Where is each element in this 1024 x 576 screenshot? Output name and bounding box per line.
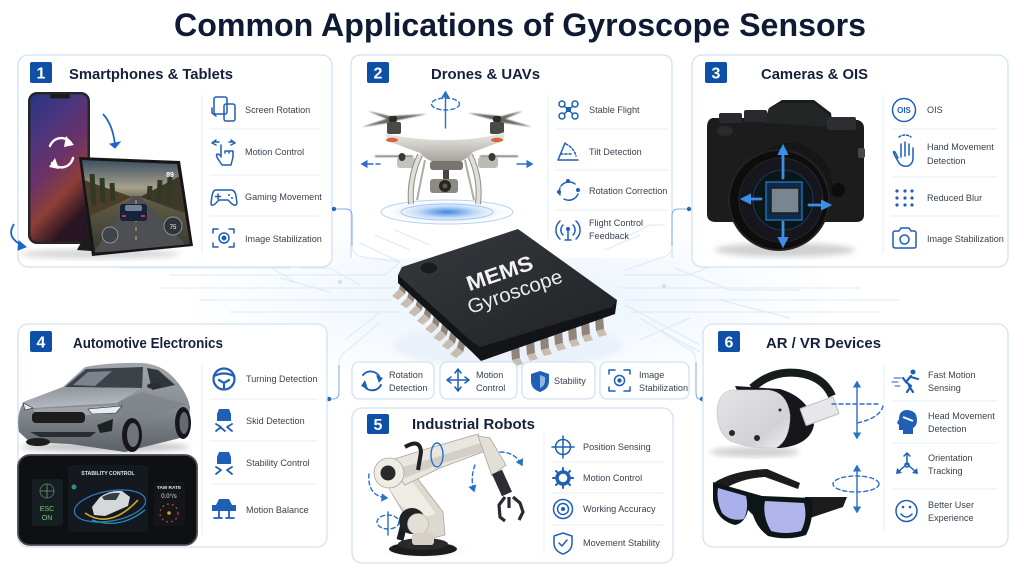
feature: head movement detection: Detection [928,424,966,434]
feature: tilt detection [558,143,642,160]
illustration: drone [362,111,532,225]
feature: position sensing: Position Sensing [583,442,651,452]
feature: image stabilization [893,228,1004,248]
feature: orientation tracking: Tracking [928,466,963,476]
heading: Cameras & OIS [761,67,868,83]
feature: hand movement detection: Detection [927,156,965,166]
feature: reduced blur [895,189,982,207]
chip pins, lower-right side [511,316,607,366]
feature: working accuracy: Working Accuracy [583,504,656,514]
feature: screen rotation [212,97,310,121]
tag: image stabilization [600,362,689,399]
badge 2 [367,62,389,83]
chip label: MEMS [464,252,536,296]
illustration: stability control dashboard: ESC [40,506,54,513]
badge 1: 1 [37,66,46,82]
chip pins, lower-left side [392,282,465,358]
feature: movement stability: Movement Stability [583,538,660,548]
feature: fast motion sensing [892,370,976,393]
feature: movement stability [554,533,660,554]
illustration: smart glasses [713,469,847,538]
illustration: stability control dashboard: STABILITY CONTROL [81,471,136,477]
feature: tilt detection: Tilt Detection [589,147,642,157]
feature: flight control feedback [556,218,643,241]
heading: Drones & UAVs [431,67,540,83]
feature: motion control: Motion Control [583,473,642,483]
feature: reduced blur: Reduced Blur [927,193,982,203]
feature: hand movement detection [894,135,994,166]
feature: screen rotation: Screen Rotation [245,105,310,115]
feature: working accuracy [554,500,656,518]
badge 4: 4 [37,334,46,352]
chip label: Gyroscope [465,266,565,319]
feature: motion balance [212,499,309,518]
feature: fast motion sensing: Fast Motion [928,370,976,380]
badge 3: 3 [712,66,721,82]
chip feature tags [352,362,689,399]
feature: better user experience: Experience [928,513,974,523]
tag: stability [522,362,595,399]
feature: stability control [216,452,310,474]
feature: motion control: Motion Control [245,147,304,157]
heading: AR / VR Devices [766,336,881,352]
badge 6 [718,331,740,352]
tag: image stabilization: Image [639,370,664,380]
illustration: car [18,363,191,452]
feature: head movement detection [897,410,995,434]
feature: image stabilization: Image Stabilization [245,234,322,244]
heading: Automotive Electronics [73,336,223,352]
feature: flight control feedback: Feedback [589,231,629,241]
feature: image stabilization: Image Stabilization [927,234,1004,244]
badge 4 [30,331,52,352]
illustration: stability control dashboard [18,455,197,545]
badge 6: 6 [725,334,734,352]
illustration: camera [707,100,865,257]
feature: motion control [553,468,642,488]
feature: fast motion sensing: Sensing [928,383,961,393]
tag: stability: Stability [554,376,586,386]
feature: gaming movement [211,190,322,205]
feature: better user experience [896,500,974,523]
heading: Industrial Robots [412,417,535,433]
feature: rotation correction [557,179,667,200]
feature: stable flight: Stable Flight [589,105,640,115]
badge 1 [30,62,52,83]
tag: image stabilization: Stabilization [639,383,688,393]
feature: rotation correction: Rotation Correction [589,186,667,196]
feature: hand movement detection: Hand Movement [927,142,994,152]
badge 2: 2 [374,66,383,82]
feature: skid detection [216,409,305,431]
MEMS gyroscope chip [392,229,623,367]
feature: OIS: OIS [927,105,943,115]
panel 4: automotive electronics [18,324,327,547]
illustration: stability control dashboard: YAW RATE [157,485,182,491]
feature: stable flight [559,101,640,119]
feature: OIS: OIS [897,106,912,115]
illustration: robot arm [374,434,523,560]
feature: position sensing [552,436,651,458]
heading: Smartphones & Tablets [69,67,233,83]
panel 6: AR and VR devices [703,324,1008,547]
panel 1: smartphones and tablets [11,55,332,267]
connector traces [270,207,704,401]
panel 3: cameras and OIS [692,55,1008,267]
illustration: phone and tablet [11,92,194,259]
badge 5 [367,414,389,434]
tag: rotation detection: Rotation [389,370,423,380]
illustration: stability control dashboard: ON [42,515,52,522]
tag: motion control: Motion [476,370,503,380]
motion arrows [369,452,522,535]
illustration: phone and tablet: 75 [170,225,177,231]
panel 5: industrial robots [352,408,673,563]
feature: turning detection [214,368,317,390]
feature: gaming movement: Gaming Movement [245,192,322,202]
illustration: phone and tablet: 89 [166,172,174,179]
tag: motion control [440,362,517,399]
panel traces [360,225,665,262]
feature: motion control [212,140,304,165]
feature: head movement detection: Head Movement [928,411,995,421]
tag: motion control: Control [476,383,505,393]
feature: better user experience: Better User [928,500,974,510]
badge 5: 5 [374,417,383,434]
title: Common Applications of Gyroscope Sensors [174,7,866,43]
feature: flight control feedback: Flight Control [589,218,643,228]
feature: image stabilization [213,229,322,247]
feature: stability control: Stability Control [246,458,310,468]
feature: motion balance: Motion Balance [246,505,309,515]
feature: turning detection: Turning Detection [246,374,317,384]
tag: rotation detection: Detection [389,383,427,393]
axis arrows [362,92,532,164]
panel 2: drones and UAVs [351,55,672,262]
feature: orientation tracking [896,453,972,476]
illustration: stability control dashboard: 0.0°/s [161,494,177,500]
badge 3 [705,62,727,83]
feature: OIS [892,98,943,122]
feature: skid detection: Skid Detection [246,416,305,426]
feature: orientation tracking: Orientation [928,453,972,463]
illustration: VR headset [710,373,839,457]
tag: rotation detection [352,362,434,399]
circuit background traces [120,205,930,395]
axis arrows [832,382,883,512]
